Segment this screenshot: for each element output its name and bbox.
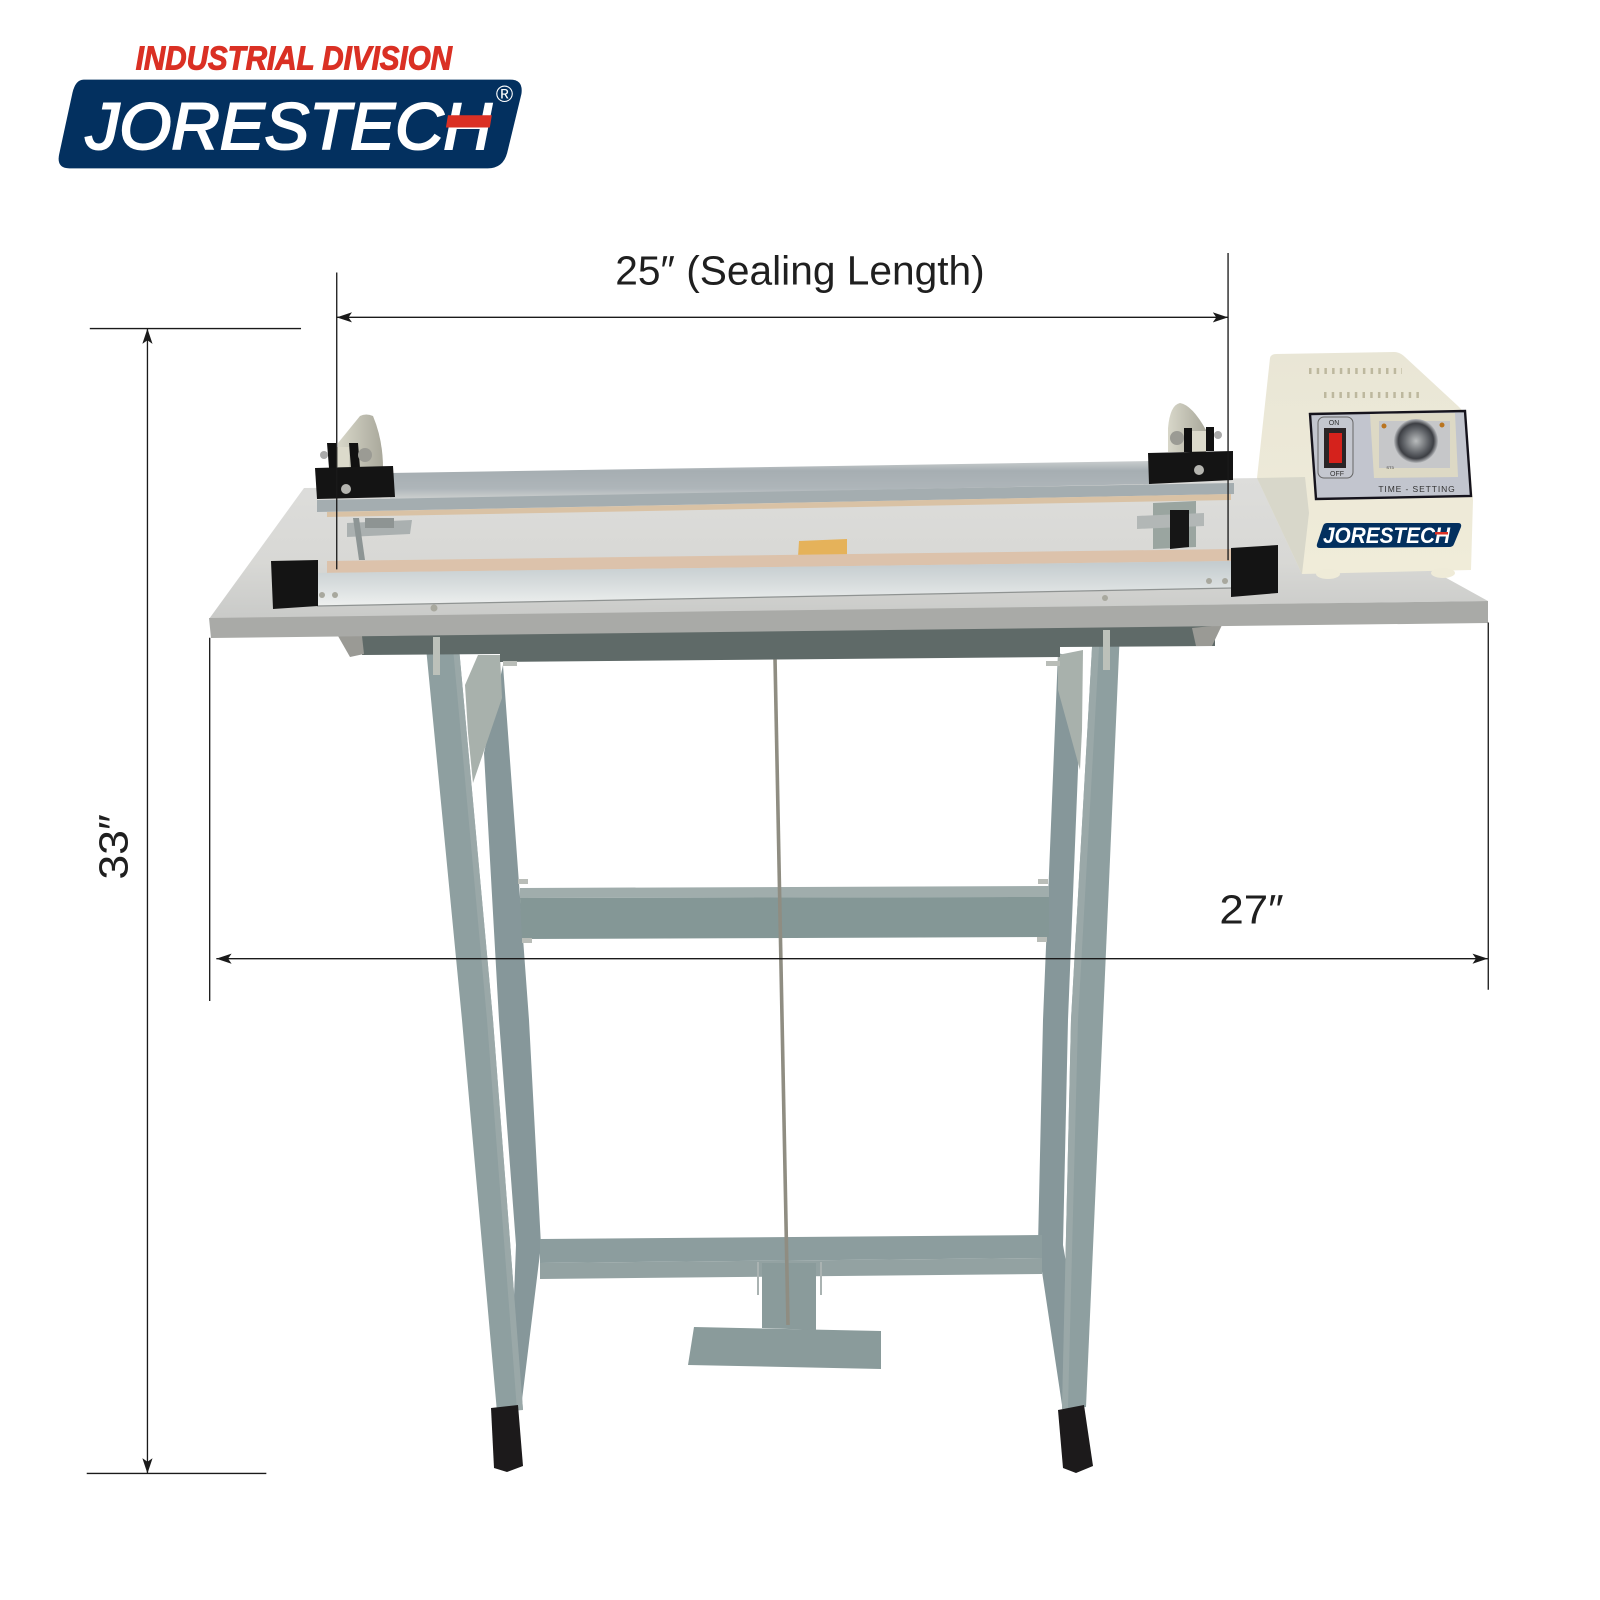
dimension: sealing length 25 inch: [337, 253, 1228, 569]
rocker switch: [1324, 428, 1346, 468]
foot pedal: [688, 1262, 881, 1369]
control panel: [1310, 411, 1471, 499]
pedal rod: [775, 658, 788, 1325]
control box body: [1257, 352, 1473, 574]
logo registered mark: ®: [496, 81, 513, 107]
stand: front legs: [425, 630, 1120, 1412]
right spring: [1192, 625, 1222, 646]
stand: middle crossbar: [520, 886, 1049, 939]
logo red bar: [446, 115, 492, 128]
rubber feet: [491, 1405, 1093, 1473]
crossbar bolts: [503, 661, 1060, 943]
badge red bar: [1435, 532, 1448, 534]
front aluminium rail: [317, 561, 1233, 606]
rail bolts: [319, 578, 1228, 612]
logo wordmark: JORESTECH: [85, 90, 492, 164]
rear left block: [315, 466, 395, 499]
vents: [1309, 371, 1420, 395]
panel labels: OFF: [1330, 471, 1344, 478]
leg mounting bolts: [433, 630, 1110, 675]
warning label: [798, 539, 847, 557]
control box wordmark: JORESTECH: [1323, 523, 1451, 548]
box feet: [1316, 568, 1455, 579]
stand: lower crossbar: [540, 1235, 1042, 1279]
front right block: [1231, 545, 1278, 597]
left hinge: [320, 415, 383, 468]
machine: impulse sealer on stand (true pixel coordinates): [209, 352, 1488, 1473]
logo badge: [59, 80, 522, 168]
logo heading: Industrial Division: INDUSTRIAL DIVISION: [136, 40, 453, 77]
table top: [209, 478, 1488, 638]
front wood strip: [327, 549, 1233, 573]
rear wood strip: [327, 494, 1231, 517]
dimension: height 33 inch: [87, 329, 301, 1473]
switch plate: [1318, 417, 1353, 478]
rear aluminium rail: [390, 461, 1152, 500]
label: 27 inch: 27″: [1219, 886, 1284, 932]
back mount right: [1137, 501, 1204, 549]
under-table frame: [338, 625, 1222, 662]
panel labels: ST3: [1386, 465, 1394, 470]
rocker red: [1329, 433, 1342, 463]
rear rail lower lip: [317, 483, 1234, 512]
back mount left: [347, 518, 412, 560]
dimension: width 27 inch: [210, 622, 1488, 1001]
rear sealing bar: [315, 403, 1234, 560]
right hinge: [1168, 403, 1222, 452]
left spring: [338, 636, 364, 657]
rear right block: [1148, 451, 1233, 484]
table front edge: [209, 601, 1488, 638]
panel labels: ON: [1329, 420, 1339, 427]
block bolts: [341, 465, 1204, 494]
front sealing bar: [271, 545, 1278, 612]
time setting label: TIME - SETTING: [1378, 484, 1456, 494]
timer face: [1379, 421, 1450, 468]
panel labels: [1329, 420, 1394, 478]
left leg brace: [465, 655, 502, 783]
indicator lamps: [1382, 423, 1444, 429]
timer dial: [1394, 419, 1438, 463]
label: 33 inch: 33″: [91, 814, 137, 880]
label: 25 inch sealing length: 25″ (Sealing Length): [615, 248, 985, 294]
stand: back legs: [465, 650, 1083, 1405]
timer plate: [1370, 413, 1458, 478]
logo: Jorestech Industrial Division: [59, 40, 522, 168]
table surface: [209, 478, 1488, 619]
front left block: [271, 560, 318, 609]
right leg brace: [1058, 650, 1083, 770]
box side shadow: [1257, 477, 1309, 574]
control box badge: [1317, 523, 1461, 548]
rail lower edge: [317, 588, 1233, 606]
control box: [1257, 352, 1473, 579]
